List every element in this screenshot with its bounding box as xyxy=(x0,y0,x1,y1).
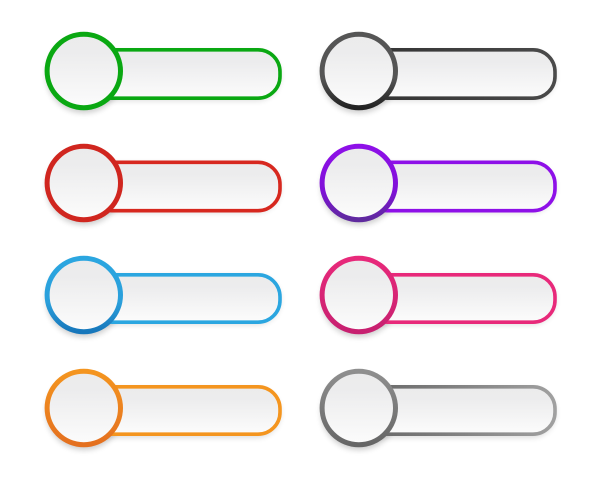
circle: blue xyxy=(47,258,120,332)
circle: red xyxy=(47,146,120,220)
bar: dark grey xyxy=(365,50,555,98)
button: blue xyxy=(46,258,281,337)
bar: orange xyxy=(90,387,280,434)
bar: purple xyxy=(365,162,555,211)
circle: pink xyxy=(322,258,396,332)
circle: dark grey xyxy=(322,34,396,108)
button: red xyxy=(46,146,281,225)
bar: green xyxy=(90,50,280,98)
bar: light grey xyxy=(365,387,555,434)
button: orange xyxy=(46,371,281,450)
bar: pink xyxy=(365,275,555,322)
bar: blue xyxy=(90,275,280,322)
circle: green xyxy=(47,34,120,108)
button: purple xyxy=(321,146,556,225)
bar: red xyxy=(90,162,280,211)
button: light grey xyxy=(321,371,556,450)
button: dark grey xyxy=(321,34,556,113)
button: green xyxy=(46,34,281,113)
circle: purple xyxy=(322,146,396,220)
button: pink xyxy=(321,258,556,337)
circle: light grey xyxy=(322,371,396,445)
circle: orange xyxy=(47,371,120,445)
